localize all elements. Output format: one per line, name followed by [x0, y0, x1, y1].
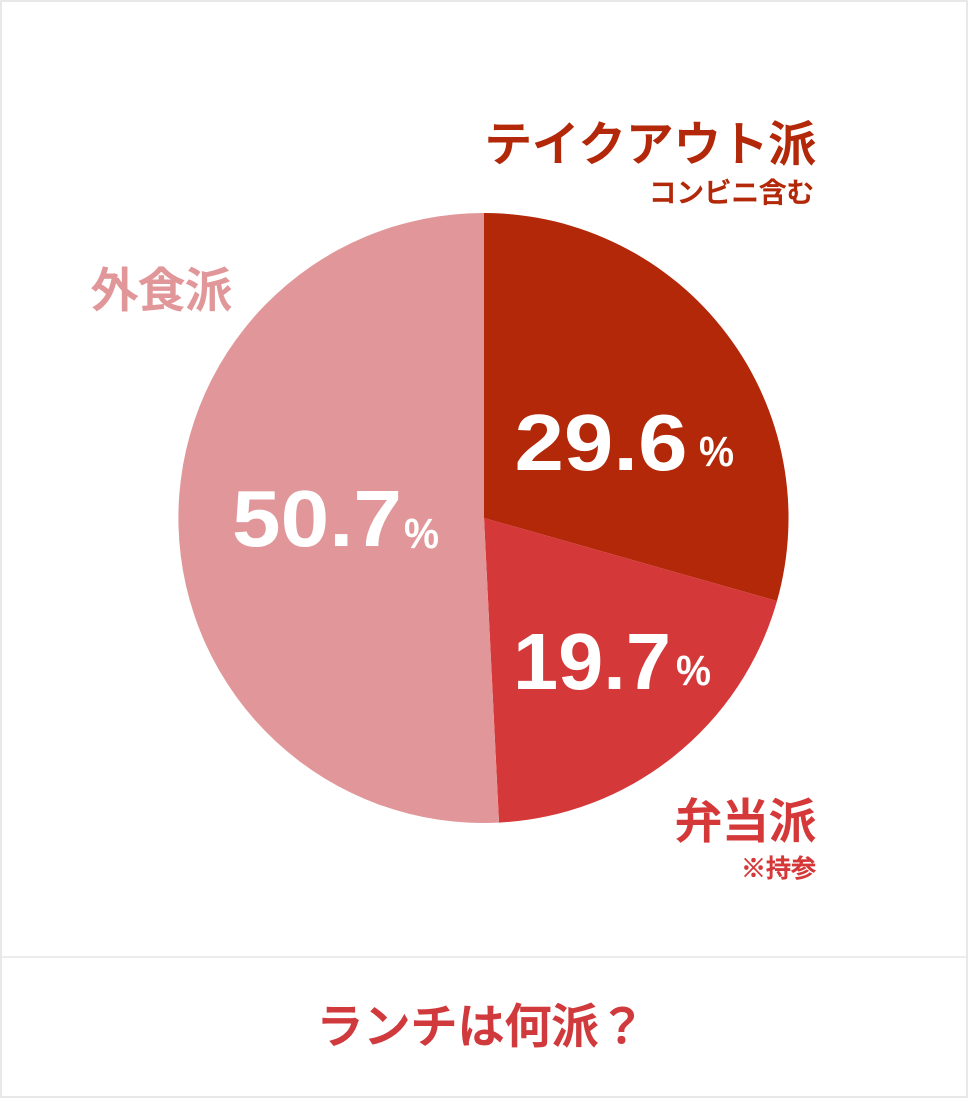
value: takeout 29.6%: 29.6 [514, 398, 688, 487]
label: bento: ※持参 [741, 849, 816, 885]
slice: takeout 29.6% [484, 213, 789, 601]
value: eating out 50.7%: % [404, 510, 439, 558]
label: eating out: 外食派 [91, 252, 232, 321]
label: bento: 弁当派 [675, 783, 816, 852]
slice: bento 19.7% [484, 518, 777, 823]
value: eating out 50.7%: 50.7 [232, 474, 402, 563]
label: takeout [484, 106, 816, 210]
value: takeout 29.6%: % [699, 428, 734, 476]
value: bento 19.7%: 19.7 [513, 617, 671, 706]
value: bento 19.7%: % [676, 647, 711, 695]
label: takeout: テイクアウト派 [484, 106, 816, 175]
pie chart [178, 213, 789, 823]
slice: eating out 50.7% [178, 213, 499, 823]
label: takeout: コンビニ含む [649, 170, 814, 210]
title: ランチは何派？ [316, 988, 646, 1057]
label: bento [675, 783, 816, 885]
